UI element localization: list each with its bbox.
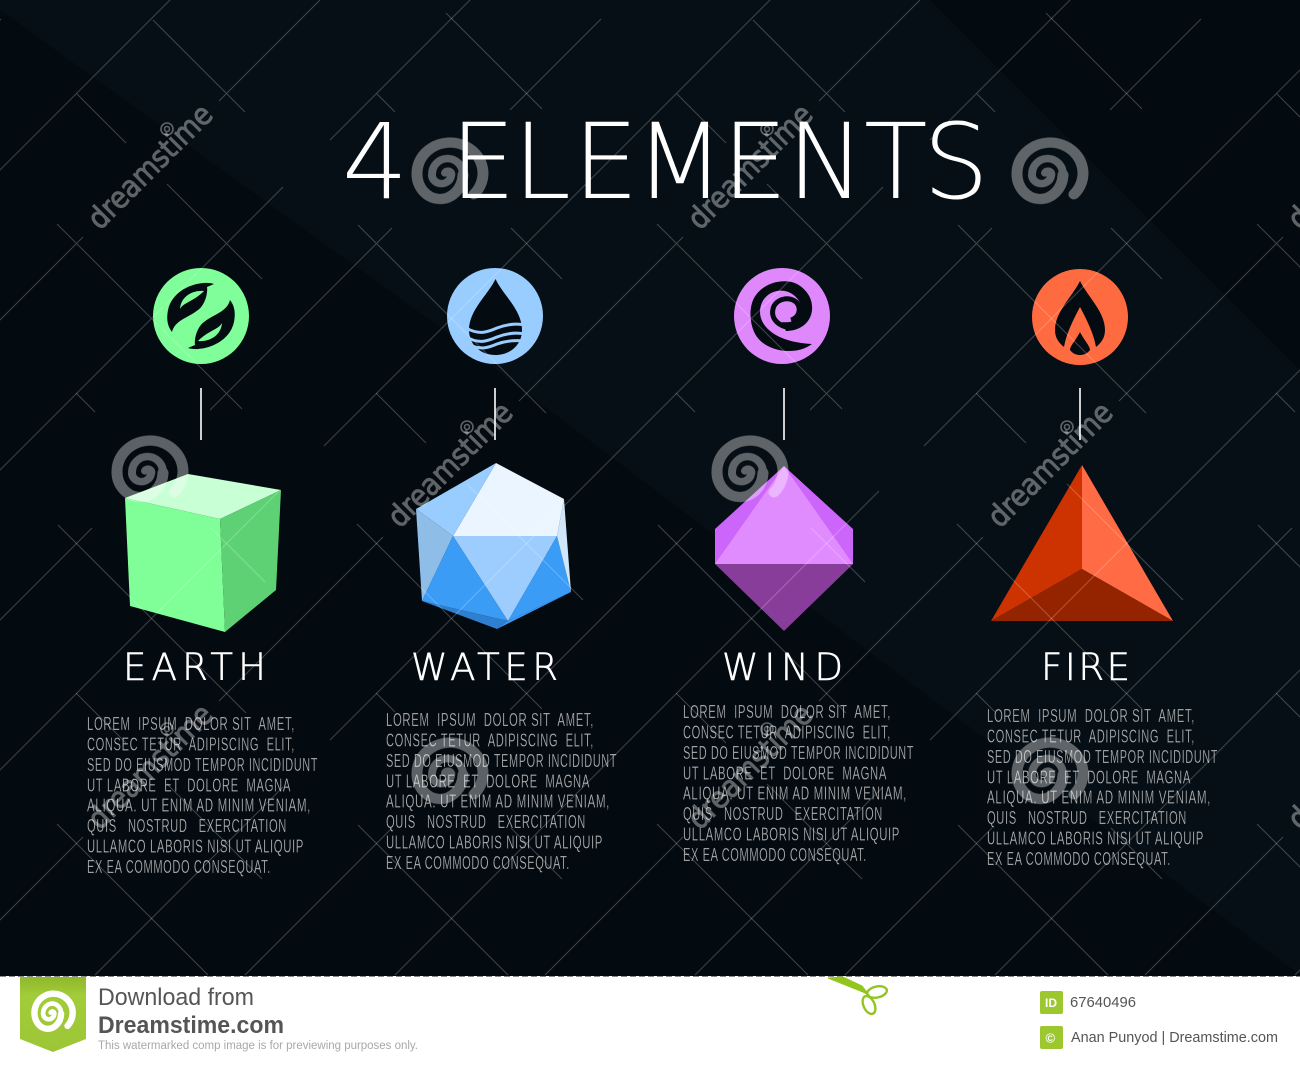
footer panel (0, 976, 1300, 1065)
text block: water: SED DO EIUSMOD TEMPOR INCIDIDUNT (386, 751, 617, 771)
watermark overlay: dreamstime (81, 97, 220, 237)
text block: fire: QUIS NOSTRUD EXERCITATION (987, 808, 1187, 828)
text block: water: LOREM IPSUM DOLOR SIT AMET, (386, 710, 594, 730)
text block: water: ALIQUA. UT ENIM AD MINIM VENIAM, (386, 792, 610, 812)
icon: earth leaves (153, 268, 249, 364)
connector: wind (783, 388, 785, 440)
image id: 67640496 (1070, 994, 1136, 1011)
text block: earth: ULLAMCO LABORIS NISI UT ALIQUIP (87, 837, 304, 857)
icon: copyright badge (1040, 1026, 1063, 1049)
icon: id badge: ID (1045, 996, 1057, 1010)
watermark overlay: dreamstime (681, 97, 820, 237)
text block: wind: EX EA COMMODO CONSEQUAT. (683, 845, 867, 865)
label: water: WATER (411, 646, 558, 689)
icon: wind spiral (734, 268, 830, 364)
text block: fire: EX EA COMMODO CONSEQUAT. (987, 849, 1171, 869)
icon: water drop (447, 268, 543, 364)
watermark overlay: dreamstime (981, 395, 1120, 535)
icon: id badge (1040, 991, 1063, 1014)
solid: earth cube (125, 474, 281, 632)
connector: earth (200, 388, 202, 440)
text block: earth: CONSEC TETUR ADIPISCING ELIT, (87, 734, 295, 754)
title: 4 ELEMENTS (342, 101, 989, 223)
credit: Anan Punyod | Dreamstime.com (1071, 1030, 1278, 1046)
text block: wind: QUIS NOSTRUD EXERCITATION (683, 804, 883, 824)
solid: water icosahedron (416, 463, 571, 629)
text block: earth (87, 714, 318, 877)
connector: fire (1079, 388, 1081, 440)
icon: copyright badge: © (1046, 1030, 1056, 1046)
text block: water: ULLAMCO LABORIS NISI UT ALIQUIP (386, 833, 603, 853)
text block: water: UT LABORE ET DOLORE MAGNA (386, 771, 590, 791)
solid: fire tetrahedron (991, 465, 1173, 621)
text block: earth: LOREM IPSUM DOLOR SIT AMET, (87, 714, 295, 734)
text block: water (386, 710, 617, 873)
connector: water (494, 388, 496, 440)
icon: fire flame (1032, 269, 1128, 365)
solid: wind octahedron (715, 466, 853, 631)
text block: wind (683, 702, 914, 865)
watermark overlay: dreamstime (681, 697, 820, 837)
text block: water: EX EA COMMODO CONSEQUAT. (386, 853, 570, 873)
text block: earth: UT LABORE ET DOLORE MAGNA (87, 775, 291, 795)
text block: wind: ULLAMCO LABORIS NISI UT ALIQUIP (683, 825, 900, 845)
text block: water: CONSEC TETUR ADIPISCING ELIT, (386, 730, 594, 750)
text block: earth: EX EA COMMODO CONSEQUAT. (87, 857, 271, 877)
text block: wind: CONSEC TETUR ADIPISCING ELIT, (683, 722, 891, 742)
text block: earth: QUIS NOSTRUD EXERCITATION (87, 816, 287, 836)
label: wind: WIND (722, 646, 843, 689)
text block: wind: LOREM IPSUM DOLOR SIT AMET, (683, 702, 891, 722)
text block: wind: ALIQUA. UT ENIM AD MINIM VENIAM, (683, 784, 907, 804)
preview notice: This watermarked comp image is for previewing purposes only. (98, 1040, 418, 1052)
icon: scissors (828, 977, 888, 1016)
label: fire: FIRE (1041, 646, 1130, 689)
icon: download ribbon (20, 977, 86, 1052)
text block: wind: SED DO EIUSMOD TEMPOR INCIDIDUNT (683, 743, 914, 763)
watermark overlay: dreamstime (81, 697, 220, 837)
download heading: Download from (98, 984, 254, 1011)
watermark overlay: dreamstime (381, 395, 520, 535)
text block: earth: SED DO EIUSMOD TEMPOR INCIDIDUNT (87, 755, 318, 775)
text block: fire (987, 706, 1218, 869)
text block: wind: UT LABORE ET DOLORE MAGNA (683, 763, 887, 783)
label: earth: EARTH (123, 646, 266, 689)
brand name: Dreamstime.com (98, 1012, 284, 1039)
text block: earth: ALIQUA. UT ENIM AD MINIM VENIAM, (87, 796, 311, 816)
text block: water: QUIS NOSTRUD EXERCITATION (386, 812, 586, 832)
